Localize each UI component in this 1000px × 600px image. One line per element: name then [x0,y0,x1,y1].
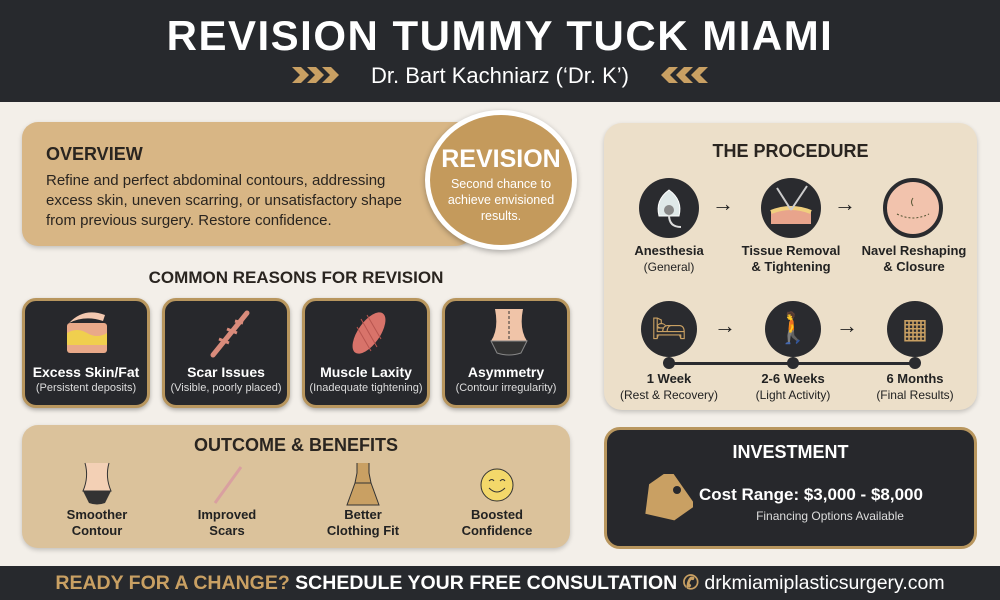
card: asymmetry: Asymmetry [468,364,544,380]
panel: the procedure: Navel Reshaping [862,243,966,258]
recovery icons: 🛏 [651,313,687,344]
timeline labels: (Rest & Recovery) [620,388,718,402]
panel: the procedure: & Tightening [751,259,831,274]
benefit: improved scars [198,466,256,538]
overview heading: OVERVIEW [46,144,143,164]
panel: investment [604,427,977,549]
benefit: confidence [462,468,532,538]
icon: skin layers [67,312,107,353]
panel: the procedure: 6 Months [886,371,944,386]
icon: muscle [352,312,386,354]
title: REVISION TUMMY TUCK MIAMI [167,12,833,59]
panel: the procedure: & Closure [883,259,945,274]
heading: common reasons: COMMON REASONS FOR REVISION [149,268,443,287]
panel: the procedure: ▦ [902,313,928,344]
benefit: smoother contour [67,462,128,538]
panel: the procedure: (Final Results) [876,388,954,402]
benefit: clothing fit [327,463,399,538]
benefit: clothing fit: Clothing Fit [327,523,399,538]
panel: investment: Financing Options Available [756,509,904,523]
card: muscle laxity: (Inadequate tightening) [309,382,423,394]
panel: the procedure: Tissue Removal [742,243,840,258]
panel: outcome & benefits [22,425,570,548]
badge: revision: results. [481,209,521,223]
header [0,0,1000,102]
investment heading: INVESTMENT [732,442,848,462]
badge: revision: Second chance to [451,177,551,191]
card: excess skin: (Persistent deposits) [36,382,136,394]
outcome heading: OUTCOME & BENEFITS [194,435,398,455]
card: excess skin [22,298,150,408]
panel: the procedure: → [714,313,736,338]
card: scar issues [162,298,290,408]
benefit: smoother contour: Smoother [67,507,127,522]
badge: revision: REVISION [441,145,561,173]
card: scar issues: (Visible, poorly placed) [170,382,282,394]
badge: revision: achieve envisioned [448,193,554,207]
benefit: confidence: Boosted [471,507,523,522]
card: excess skin: Excess Skin/Fat [33,364,139,380]
overview text: Refine and perfect abdominal contours, addressing excess skin, uneven scarring, or unsatisfactory shape from previous surgery. Restore confidence. [46,172,402,229]
panel: the procedure: → [834,191,856,216]
icon: navel closure [883,178,943,238]
icon: price tag [645,474,693,520]
step labels: Anesthesia [634,243,704,258]
panel: the procedure [604,123,977,410]
subtitle [292,63,708,88]
panel: the procedure: (Light Activity) [756,388,830,402]
badge: revision [425,110,577,250]
panel: overview [22,122,472,246]
step labels [634,243,704,274]
timeline [669,362,915,365]
card: asymmetry [442,298,570,408]
card: scar issues: Scar Issues [187,364,265,380]
timeline labels: 1 Week [647,371,691,386]
procedure heading: THE PROCEDURE [712,141,868,161]
timeline labels [620,371,718,402]
icon: tissue removal [761,178,821,238]
card: asymmetry: (Contour irregularity) [456,382,556,394]
benefit: improved scars: Scars [209,523,245,538]
footer: READY FOR A CHANGE? SCHEDULE YOUR FREE CONSULTATION ✆ drkmiamiplasticsurgery.com [55,572,945,594]
benefit: smoother contour: Contour [72,523,122,538]
icon: anesthesia mask [639,178,699,238]
benefit: clothing fit: Better [344,507,382,522]
arrows row 1: → [712,191,734,216]
footer [0,566,1000,600]
recovery icons [641,301,697,357]
card: muscle laxity [302,298,430,408]
benefit: improved scars: Improved [198,507,256,522]
step labels: (General) [644,260,694,274]
icon: torso [490,309,528,356]
panel: the procedure: 2-6 Weeks [761,371,825,386]
panel: the procedure: → [836,313,858,338]
subtitle: Dr. Bart Kachniarz (‘Dr. K’) [371,63,629,88]
cost range: Cost Range: $3,000 - $8,000 [699,485,923,504]
panel: the procedure: 🚶 [774,312,812,345]
card: muscle laxity: Muscle Laxity [320,364,412,380]
benefit: confidence: Confidence [462,523,532,538]
icon: scar [210,310,250,358]
